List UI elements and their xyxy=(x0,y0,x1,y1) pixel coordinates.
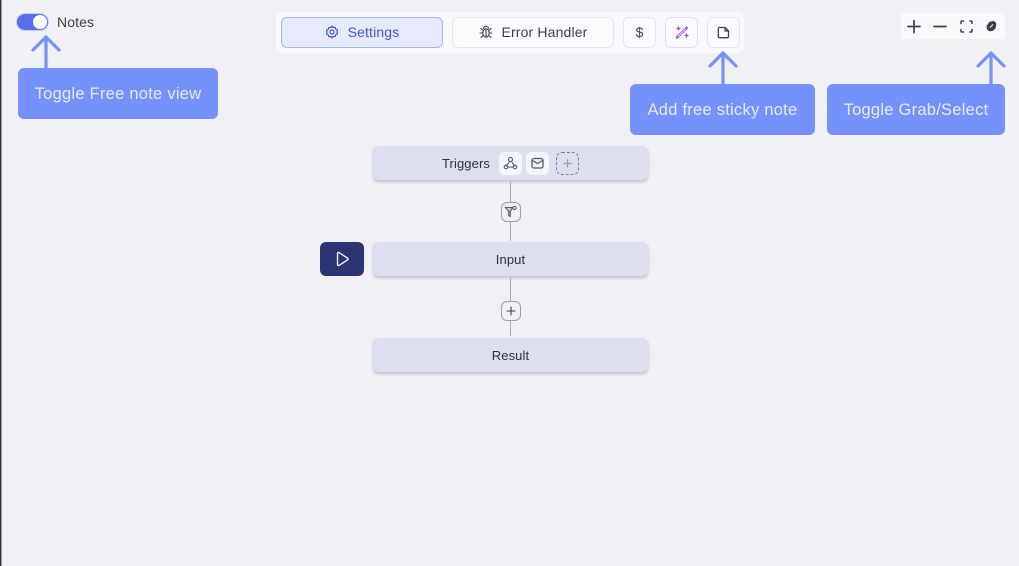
add trigger button xyxy=(556,152,579,175)
icon: bug xyxy=(480,26,492,38)
node: result xyxy=(373,338,648,372)
callout: add free sticky note xyxy=(630,84,815,135)
button: error handler xyxy=(452,17,614,48)
icon: plus xyxy=(506,306,516,316)
node: input: Input xyxy=(496,252,525,266)
icon: note xyxy=(718,26,730,38)
connector: input to result xyxy=(510,278,511,336)
connector: triggers to input xyxy=(510,182,511,241)
callout: toggle grab/select xyxy=(827,84,1005,135)
button: error handler: Error Handler xyxy=(502,24,587,40)
node: result: Result xyxy=(492,348,529,362)
toggle label: Notes xyxy=(57,14,94,30)
icon: mail xyxy=(526,152,549,175)
toggle: notes xyxy=(16,13,94,31)
button: dollar xyxy=(623,17,656,48)
node: input xyxy=(373,242,648,276)
button: sticky note xyxy=(707,17,740,48)
node: triggers xyxy=(373,146,648,180)
add step button xyxy=(501,301,521,321)
arrow: to sticky note button xyxy=(708,51,738,84)
button: settings xyxy=(281,17,443,48)
arrow: to grab toggle xyxy=(976,51,1006,84)
icon: webhook xyxy=(499,152,522,175)
callout: add free sticky note: Add free sticky note xyxy=(648,101,797,119)
callout: toggle free note view xyxy=(18,68,218,119)
button: dollar: $ xyxy=(636,24,643,40)
toolbar xyxy=(276,12,744,53)
icon: filter xyxy=(505,206,516,217)
icons: plus, minus, fit, grab xyxy=(907,20,996,34)
zoom controls xyxy=(901,13,1005,39)
arrow: to notes toggle xyxy=(31,35,61,68)
filter button xyxy=(501,202,521,222)
icon: play xyxy=(336,252,349,266)
icon: gear xyxy=(326,25,338,39)
button: settings: Settings xyxy=(348,24,399,40)
button: magic wand xyxy=(665,17,698,48)
toggle switch xyxy=(17,14,48,30)
run button xyxy=(320,242,364,276)
left edge strip xyxy=(0,0,2,566)
callout: toggle free note view: Toggle Free note view xyxy=(35,85,201,103)
node label: Triggers xyxy=(442,156,490,171)
icon: wand xyxy=(676,26,689,39)
callout: toggle grab/select: Toggle Grab/Select xyxy=(844,101,988,119)
